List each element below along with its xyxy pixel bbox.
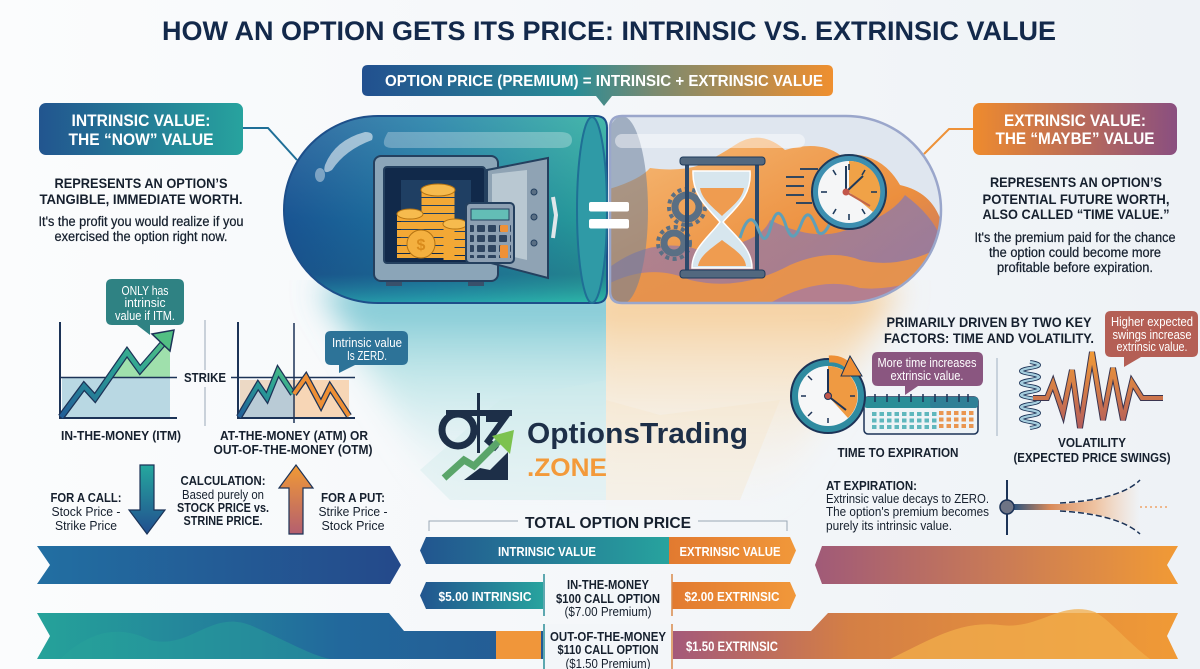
icon: safe — [374, 156, 556, 286]
ribbon: top right — [815, 546, 1178, 584]
icon: volatility wave — [740, 208, 836, 238]
logo mark — [442, 393, 514, 480]
text: intrinsic description: REPRESENTS AN OPTION’S — [54, 175, 228, 191]
callout: only ITM — [106, 279, 184, 335]
label: strike: STRIKE — [184, 371, 226, 385]
text: at expiration: Extrinsic value decays to ZERO. — [826, 492, 989, 506]
stacked bar: total option price: TOTAL OPTION PRICE — [525, 515, 691, 532]
capsule: left half with safe — [284, 116, 607, 303]
chart: time decay — [1000, 480, 1170, 535]
heading: extrinsic value: EXTRINSIC VALUE: — [1004, 112, 1146, 130]
text: for a put: Strike Price - — [318, 505, 388, 519]
callout: only ITM: intrinsic — [124, 296, 166, 310]
label: volatility — [1014, 436, 1170, 465]
logo: options trading zone: OptionsTrading — [527, 418, 748, 450]
heading: key factors — [884, 314, 1094, 346]
icon: volatility zigzag — [1033, 352, 1163, 428]
arrow: up — [279, 465, 313, 534]
text: intrinsic description: It's the profit you would realize if you — [38, 214, 244, 229]
logo: options trading zone: .ZONE — [527, 454, 607, 482]
formula banner: OPTION PRICE (PREMIUM) = INTRINSIC + EXTRINSIC VALUE — [385, 73, 823, 90]
chart: in-the-money — [60, 322, 177, 418]
icon: clock — [786, 155, 886, 229]
stacked bar: total option price: EXTRINSIC VALUE — [680, 545, 780, 559]
label: volatility: VOLATILITY — [1058, 436, 1127, 450]
divider: strike — [204, 320, 206, 426]
text: extrinsic description — [974, 174, 1176, 275]
callout: higher swings — [1105, 311, 1198, 367]
heading: key factors: PRIMARILY DRIVEN BY TWO KEY — [886, 314, 1092, 330]
text: calculation: STRINE PRICE. — [184, 514, 262, 528]
text: at expiration: purely its intrinsic value. — [826, 519, 952, 533]
label: ITM: IN-THE-MONEY (ITM) — [61, 429, 181, 443]
connector: extrinsic — [924, 129, 973, 154]
text: intrinsic description: TANGIBLE, IMMEDIATE WORTH. — [40, 191, 242, 207]
chart: at or out of the money — [231, 322, 355, 423]
orange glow below capsule — [580, 285, 900, 505]
callout: more time: More time increases — [878, 356, 976, 370]
icon: hourglass — [680, 157, 765, 278]
label: ATM or OTM: AT-THE-MONEY (ATM) OR — [220, 429, 368, 443]
equals sign — [589, 202, 629, 228]
row: in-the-money example: $5.00 INTRINSIC — [438, 589, 532, 604]
icon: coins: $ — [417, 237, 426, 254]
formula banner — [362, 65, 833, 106]
calendar — [864, 394, 978, 434]
row: out-of-the-money example — [544, 624, 672, 669]
text: at expiration: AT EXPIRATION: — [826, 479, 917, 493]
row: out-of-the-money example: OUT-OF-THE-MONEY — [550, 629, 666, 644]
label: ATM or OTM — [214, 429, 372, 457]
blue glow below capsule — [320, 285, 640, 505]
heading: key factors: FACTORS: TIME AND VOLATILITY. — [884, 330, 1094, 346]
heading: intrinsic value: THE “NOW” VALUE — [68, 131, 214, 149]
bracket — [429, 521, 518, 531]
text: for a put — [318, 491, 388, 533]
text: extrinsic description: the option could become more — [989, 245, 1161, 260]
callout: higher swings: Higher expected — [1111, 315, 1193, 329]
icon: coins — [397, 184, 467, 260]
text: extrinsic description: REPRESENTS AN OPTION’S — [990, 174, 1162, 190]
ribbon: bottom right — [673, 609, 1178, 659]
text: calculation — [177, 474, 269, 528]
callout: intrinsic zero — [325, 331, 408, 373]
heading: intrinsic value — [39, 103, 243, 155]
connector: intrinsic — [243, 128, 297, 160]
capsule: right half with hourglass and clock — [596, 116, 945, 310]
text: for a call: Strike Price — [55, 519, 117, 533]
callout: more time: extrinsic value. — [890, 369, 964, 383]
callout: intrinsic zero: Intrinsic value — [332, 336, 402, 350]
divider: factors — [996, 358, 998, 436]
ribbon: bottom left — [37, 613, 543, 659]
ribbon: bottom right: $1.50 EXTRINSIC — [686, 639, 778, 654]
text: calculation: Based purely on — [182, 488, 264, 502]
callout: higher swings: extrinsic value. — [1116, 340, 1188, 354]
text: for a call: FOR A CALL: — [50, 491, 122, 505]
row: in-the-money example: IN-THE-MONEY — [567, 577, 649, 592]
row: out-of-the-money example: $110 CALL OPTION — [558, 642, 658, 657]
text: extrinsic description: profitable before expiration. — [997, 260, 1153, 275]
heading: intrinsic value: INTRINSIC VALUE: — [72, 112, 210, 130]
logo: options trading zone — [442, 393, 748, 482]
row: in-the-money example — [420, 574, 796, 619]
callout: intrinsic zero: Is ZERD. — [347, 349, 387, 363]
text: intrinsic description — [38, 175, 244, 244]
text: for a put: Stock Price — [322, 519, 385, 533]
title: HOW AN OPTION GETS ITS PRICE: INTRINSIC VS. EXTRINSIC VALUE — [162, 16, 1056, 46]
ribbon: top left — [37, 546, 401, 584]
text: for a call: Stock Price - — [52, 505, 120, 519]
callout: higher swings: swings increase — [1112, 328, 1192, 342]
icon: calculator — [466, 203, 514, 263]
text: extrinsic description: POTENTIAL FUTURE WORTH, — [982, 191, 1170, 207]
row: in-the-money example: $100 CALL OPTION — [556, 591, 660, 606]
row: in-the-money example: $2.00 EXTRINSIC — [684, 589, 780, 604]
callout: only ITM: ONLY has — [122, 284, 168, 298]
icon: spring — [1021, 362, 1039, 428]
label: volatility: (EXPECTED PRICE SWINGS) — [1014, 451, 1170, 465]
icon: gears — [658, 189, 705, 259]
label: time to expiration: TIME TO EXPIRATION — [838, 446, 958, 460]
text: at expiration — [826, 479, 989, 533]
text: for a put: FOR A PUT: — [321, 491, 385, 505]
heading: extrinsic value — [973, 103, 1177, 155]
text: for a call — [50, 491, 122, 533]
row: in-the-money example: ($7.00 Premium) — [564, 604, 652, 619]
label: ATM or OTM: OUT-OF-THE-MONEY (OTM) — [214, 443, 372, 457]
stacked bar: total option price — [420, 515, 796, 564]
callout: only ITM: value if ITM. — [115, 309, 175, 323]
callout: more time — [872, 352, 983, 395]
text: calculation: CALCULATION: — [180, 474, 266, 488]
heading: extrinsic value: THE “MAYBE” VALUE — [996, 130, 1154, 148]
text: at expiration: The option's premium becomes — [826, 505, 989, 519]
arrow: down — [129, 465, 165, 534]
text: calculation: STOCK PRICE vs. — [177, 501, 269, 515]
stacked bar: total option price: INTRINSIC VALUE — [498, 545, 596, 559]
icon: clock and calendar — [791, 356, 978, 434]
text: extrinsic description: ALSO CALLED “TIME VALUE.” — [982, 206, 1170, 222]
text: extrinsic description: It's the premium paid for the chance — [974, 230, 1176, 245]
text: intrinsic description: exercised the option right now. — [54, 229, 228, 244]
